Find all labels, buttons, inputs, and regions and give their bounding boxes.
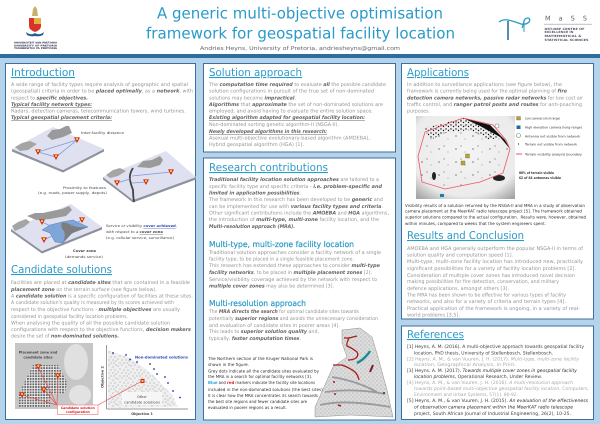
multi-resolution text: and evaluation of candidate sites in poorer areas [4]. bbox=[209, 323, 340, 329]
reference 1: [1] Heyns, A. M. (2016). A multi-objective approach towards geospatial facility bbox=[407, 344, 584, 350]
reference 2 bbox=[407, 356, 579, 368]
research contributions text: Traditional facility location solution approaches are tailored to a bbox=[209, 177, 379, 183]
legend bbox=[516, 116, 582, 180]
solution approach text: Asexual multi-objective evolutionary-based algorithm (AMOEBA), bbox=[209, 136, 370, 142]
logo: MaSS: MaSS bbox=[545, 14, 587, 22]
solution approach text: The computation time required to evaluate all the possible candidate bbox=[208, 82, 386, 88]
figure: inter-facility distance terrain: Inter-facility distance bbox=[81, 131, 124, 135]
logo: MaSS: EXCELLENCE IN bbox=[544, 30, 574, 34]
multi-resolution text bbox=[208, 309, 378, 342]
figure caption bbox=[405, 203, 586, 226]
reference 5 bbox=[407, 398, 589, 417]
intro text: Radars, detection cameras, telecommunication towers, wind turbines. bbox=[11, 108, 186, 114]
multi-type text: facility type, to be placed in a single feasible placement zone. bbox=[209, 256, 354, 262]
reference 2: location , Geographical Analysis, In Print. bbox=[414, 362, 516, 368]
applications text: purposes. bbox=[407, 108, 430, 114]
candidate solutions text: When analysing the quality of all the possible candidate solution bbox=[11, 320, 170, 326]
results text: significant possibilities for a variety of facility location problems [2]. bbox=[407, 266, 576, 272]
candidate solutions text: Facilities are placed at candidate sites that are contained in a feasible bbox=[11, 280, 190, 286]
results text bbox=[406, 246, 583, 318]
candidate solutions text: considered in geospatial facility location problems. bbox=[11, 314, 128, 320]
logo: University of Pretoria crest: UNIVERSITY OF PRETORIA bbox=[14, 44, 57, 47]
heading: Candidate solutions: Candidate solutions bbox=[11, 263, 112, 276]
applications text: traffic control, and ranger patrol posts and routes for anti-poaching bbox=[407, 102, 582, 108]
multi-type text: Traditional solution approaches consider a facility network of a single bbox=[208, 250, 381, 256]
applications text: In addition to surveillance applications (see figure below), the bbox=[407, 82, 562, 88]
research contributions text: the introduction of multi-type, multi-zone facility location, and the bbox=[209, 217, 379, 223]
callout: candidate solution configuration: Candidate solution bbox=[61, 406, 95, 410]
heading: Results and Conclusion: Results and Conclusion bbox=[407, 229, 524, 242]
logo: University of Pretoria crest bbox=[13, 6, 57, 50]
logo: MaSS: MATHEMATICAL & bbox=[544, 34, 582, 38]
header rule bbox=[0, 54, 600, 58]
results text: Multi-type, multi-zone facility location has introduced new, practically bbox=[407, 259, 583, 265]
solution approach text: Non-dominated sorting genetic algorithm-II (NSGA-II). bbox=[209, 122, 339, 128]
reference 3: [3] Heyns, A. M. (2017). Towards multiple cover zones in geospatial facility bbox=[407, 368, 577, 374]
figure: cover zone terrain: Service or visibility cover achieved , bbox=[106, 224, 177, 228]
multi-type text bbox=[208, 250, 381, 290]
heading: References: References bbox=[407, 328, 464, 341]
map caption: Grey dots indicate all the candidate sites evaluated by bbox=[208, 368, 319, 374]
callout: candidate solution configuration: configuration bbox=[66, 410, 91, 414]
chart: objective space scatter bbox=[98, 345, 188, 416]
map caption: evaluated in poorer regions as a result. bbox=[208, 405, 287, 410]
panel: references bbox=[402, 326, 594, 420]
map caption: the MRA in a search for optimal facility networks [3]. bbox=[208, 374, 312, 379]
heading: Applications: Applications bbox=[407, 66, 469, 79]
figure: cover zone terrain: (demands service) bbox=[65, 255, 104, 259]
figure: proximity to features terrain bbox=[38, 151, 196, 202]
panel: introduction and candidate solutions bbox=[6, 64, 196, 420]
figure: placement zone and candidate sites: candidate sites bbox=[23, 356, 53, 360]
figure: cover zone terrain: Cover zone bbox=[73, 249, 97, 253]
legend: Terrain visibility analysis boundary bbox=[524, 152, 582, 156]
reference 5: of observation camera placement within the MeerKAT radio telescope bbox=[414, 404, 573, 410]
figure caption: Visibility results of a solution returned by the NSGA-II and MRA in a study of observation bbox=[405, 203, 585, 208]
solution approach text bbox=[208, 82, 386, 148]
applications text bbox=[407, 82, 584, 114]
solution approach text: Hybrid geospatial algorithm (HGA) [1]. bbox=[209, 142, 304, 148]
multi-type text: multiple cover zones may also be determined [3]. bbox=[209, 284, 334, 290]
logo: MaSS bbox=[499, 14, 592, 42]
candidate solutions text: placement zone on the terrain surface (see figure below). bbox=[10, 287, 157, 293]
figure: placement zone and candidate sites bbox=[15, 343, 93, 409]
multi-type text: This research has extended these approaches to consider multi-type bbox=[208, 263, 381, 269]
map caption bbox=[207, 356, 324, 410]
results text: networks, and also for a variety of criteria and terrain types [4]. bbox=[407, 299, 566, 305]
chart: objective space scatter: candidate solutions bbox=[124, 400, 160, 404]
title: A generic multi-objective optimisation bbox=[157, 4, 443, 22]
solution approach text: solution configurations in pursuit of the true set of non-dominated bbox=[209, 88, 374, 94]
research contributions text: limited in application possibilities. bbox=[209, 190, 301, 196]
reference 4: towards point-based multi-objective geospatial facility location, Computers, bbox=[414, 386, 590, 392]
solution approach text: Algorithms that approximate the set of non-dominated solutions are bbox=[208, 102, 383, 108]
panel: applications and results bbox=[402, 64, 594, 319]
candidate solutions text: respect to the objective functions - multiple objectives are usually bbox=[11, 307, 180, 313]
solution approach text: employed, and avoid having to evaluate the entire solution space. bbox=[209, 108, 373, 114]
reference 4: [4] Heyns, A. M., & van Vuuren, J. H. (2016). A multi-resolution approach bbox=[407, 380, 573, 386]
map: Kruger National Park search results bbox=[315, 328, 393, 417]
research contributions text: Other significant contributions include the AMOEBA and HGA algorithms, bbox=[209, 210, 389, 216]
reference 3: location problems, Operational Research, Under Review. bbox=[414, 374, 542, 380]
candidate solutions text: A candidate solution is a specific configuration of facilities at these sites. bbox=[11, 294, 193, 300]
figure: terrain visibility map bbox=[416, 116, 515, 199]
figure: cover zone terrain bbox=[11, 204, 177, 259]
figure caption: camera placement at the MeerKAT radio telescope project [5]. The framework obtained bbox=[405, 208, 582, 214]
multi-resolution text: This leads to superior solution quality and, bbox=[208, 329, 319, 335]
legend: Antenna not visible from network bbox=[525, 134, 580, 138]
reference 5: [5] Heyns, A. M., & van Vuuren, J. H. (2015). An evaluation of the effectiveness bbox=[407, 398, 589, 404]
figure caption: within minutes, compared to weeks that the system engineers spent. bbox=[405, 221, 546, 226]
map caption: included in the non-dominated solutions (the best sites). bbox=[208, 387, 324, 392]
legend: High elevation camera (long-range) bbox=[525, 126, 582, 130]
header bbox=[0, 4, 600, 58]
figure: cover zone terrain: (e.g. cellular service, surveillance) bbox=[106, 236, 175, 240]
applications text: detection camera networks, passive radar networks for low cost air bbox=[407, 95, 584, 101]
figure: inter-facility distance terrain bbox=[12, 126, 124, 172]
author line: Andries Heyns, University of Pretoria, andriesheyns@gmail.com bbox=[200, 45, 400, 52]
chart: objective space scatter: Non-dominated solutions bbox=[135, 356, 188, 360]
map caption: the best site regions and fewer candidate sites are bbox=[208, 399, 307, 404]
results text: AMOEBA and HGA generally outperform the popular NSGA-II in terms of bbox=[407, 246, 583, 252]
intro text: respect to specific objectives. bbox=[11, 95, 88, 101]
reference 1: location, PhD thesis, University of Stellenbosch, Stellenbosch. bbox=[414, 350, 553, 356]
map caption: It is clear how the MRA concentrates its search towards bbox=[208, 393, 318, 398]
reference 4: Environment and Urban Systems, 57(1), 80-92. bbox=[414, 392, 518, 398]
legend: 62 of 64 antennas visible bbox=[519, 176, 562, 180]
research contributions text: The framework in this research has been developed to be generic and bbox=[208, 197, 383, 203]
figure: placement zone and candidate sites: Placement zone and bbox=[19, 350, 58, 354]
legend: Terrain not visible from network bbox=[524, 142, 577, 146]
candidate solutions text: desire the set of non-dominated solutions. bbox=[11, 334, 119, 340]
multi-resolution text: typically, faster computation times. bbox=[209, 336, 301, 342]
results text: Practical application of the framework is ongoing, in a variety of real- bbox=[407, 306, 580, 312]
map caption: The Northern section of the Kruger National Park is bbox=[207, 356, 313, 361]
legend: 88% of terrain visible bbox=[519, 171, 555, 175]
figure: proximity to features terrain: Proximity to features bbox=[63, 186, 106, 190]
panel: solution approach bbox=[204, 64, 396, 152]
logo: University of Pretoria crest: YUNIBESITHI YA PRETORIA bbox=[13, 47, 57, 50]
solution approach text: Newly developed algorithms in this research: bbox=[209, 129, 327, 135]
multi-type text: facility networks, to be placed in multiple placement zones [2]. bbox=[209, 270, 372, 276]
heading: Introduction: Introduction bbox=[11, 66, 75, 79]
reference 1 bbox=[407, 344, 584, 356]
research contributions text: Multi-resolution approach (MRA). bbox=[209, 224, 295, 230]
intro text bbox=[11, 82, 193, 121]
figure caption: superior solutions compared to the actual configuration. Results were, however, obtained bbox=[405, 214, 586, 220]
results text: Consideration of multiple cover zones has introduced novel decision bbox=[407, 273, 575, 279]
research contributions text: specific facility type and specific criteria - i.e. problem-specific and bbox=[209, 184, 382, 190]
reference 4 bbox=[407, 380, 590, 398]
chart: objective space scatter: Other bbox=[137, 395, 147, 399]
subheading: Multi-type, multi-zone facility location: Multi-type, multi-zone facility location bbox=[209, 240, 354, 249]
intro text: Typical facility network types: bbox=[11, 102, 92, 108]
figure: proximity to features terrain: (e.g. roads, power supply, depots) bbox=[38, 191, 108, 195]
multi-resolution text: potentially superior regions and avoids the unnecessary consideration bbox=[209, 316, 378, 322]
results text: solution quality and computation speed [1]. bbox=[407, 252, 513, 258]
logo: MaSS: DST-NRF CENTRE OF bbox=[544, 27, 584, 31]
title bbox=[146, 4, 455, 42]
legend: Core cameras (short-range) bbox=[525, 116, 560, 120]
applications text: framework is currently being used for the optimal planning of fire bbox=[407, 88, 568, 94]
reference 3 bbox=[407, 368, 577, 380]
candidate solutions text bbox=[10, 280, 193, 340]
results text: world problems [3,5]. bbox=[407, 312, 460, 318]
intro text: (geospatial) criteria in order to be placed optimally, as a network, with bbox=[11, 88, 193, 94]
logo: University of Pretoria crest: UNIVERSITEIT VAN PRETORIA bbox=[14, 42, 57, 44]
chart: objective space scatter: Objective 2 bbox=[100, 366, 104, 388]
candidate solutions text: A candidate solution's quality is measured by its scores achieved with bbox=[11, 300, 174, 306]
results text: making possibilities for fire detection, conservation, and military bbox=[407, 279, 559, 285]
figure: cover zone terrain: with respect to a cover zone bbox=[106, 230, 164, 234]
results text: defence applications, amongst others [3]. bbox=[407, 286, 509, 292]
logo: MaSS: STATISTICAL SCIENCES bbox=[544, 38, 588, 42]
title: framework for geospatial facility location bbox=[146, 24, 455, 42]
map caption: Blue and red markers indicate the facility site locations bbox=[208, 380, 315, 385]
subheading: Multi-resolution approach: Multi-resolution approach bbox=[209, 299, 306, 308]
candidate solutions text: configurations with respect to the objective functions, decision makers bbox=[11, 327, 191, 333]
map caption: shown in the figure. bbox=[208, 362, 249, 367]
callout: candidate solution configuration bbox=[58, 405, 98, 414]
solution approach text: solutions may become impractical. bbox=[209, 95, 296, 101]
panel: research contributions bbox=[204, 158, 396, 420]
intro text: A wide range of facility types require analysis of geographic and spatial bbox=[11, 82, 188, 88]
research contributions text: can be implemented for use with various facility types and criteria. bbox=[209, 204, 383, 210]
reference 2: [2] Heyns, A. M., & van Vuuren, J. H. (2017). Multi-type, multi-zone facility bbox=[407, 356, 579, 362]
multi-resolution text: The MRA directs the search for optimal candidate sites towards bbox=[208, 309, 359, 315]
reference 5: project, South African Journal of Industrial Engineering, 26(2), 10-25. bbox=[414, 411, 571, 417]
multi-type text: Service/visibility coverage achieved by the network with respect to bbox=[209, 277, 377, 283]
results text: The MRA has been shown to be effective for various types of facility bbox=[406, 292, 566, 298]
research contributions text bbox=[208, 177, 389, 230]
heading: Research contributions: Research contributions bbox=[209, 161, 328, 174]
solution approach text: Existing algorithm adapted for geospatial facility location: bbox=[209, 115, 365, 121]
heading: Solution approach: Solution approach bbox=[209, 66, 302, 79]
chart: objective space scatter: Objective 1 bbox=[131, 412, 153, 416]
intro text: Typical geospatial placement criteria: bbox=[11, 115, 112, 121]
